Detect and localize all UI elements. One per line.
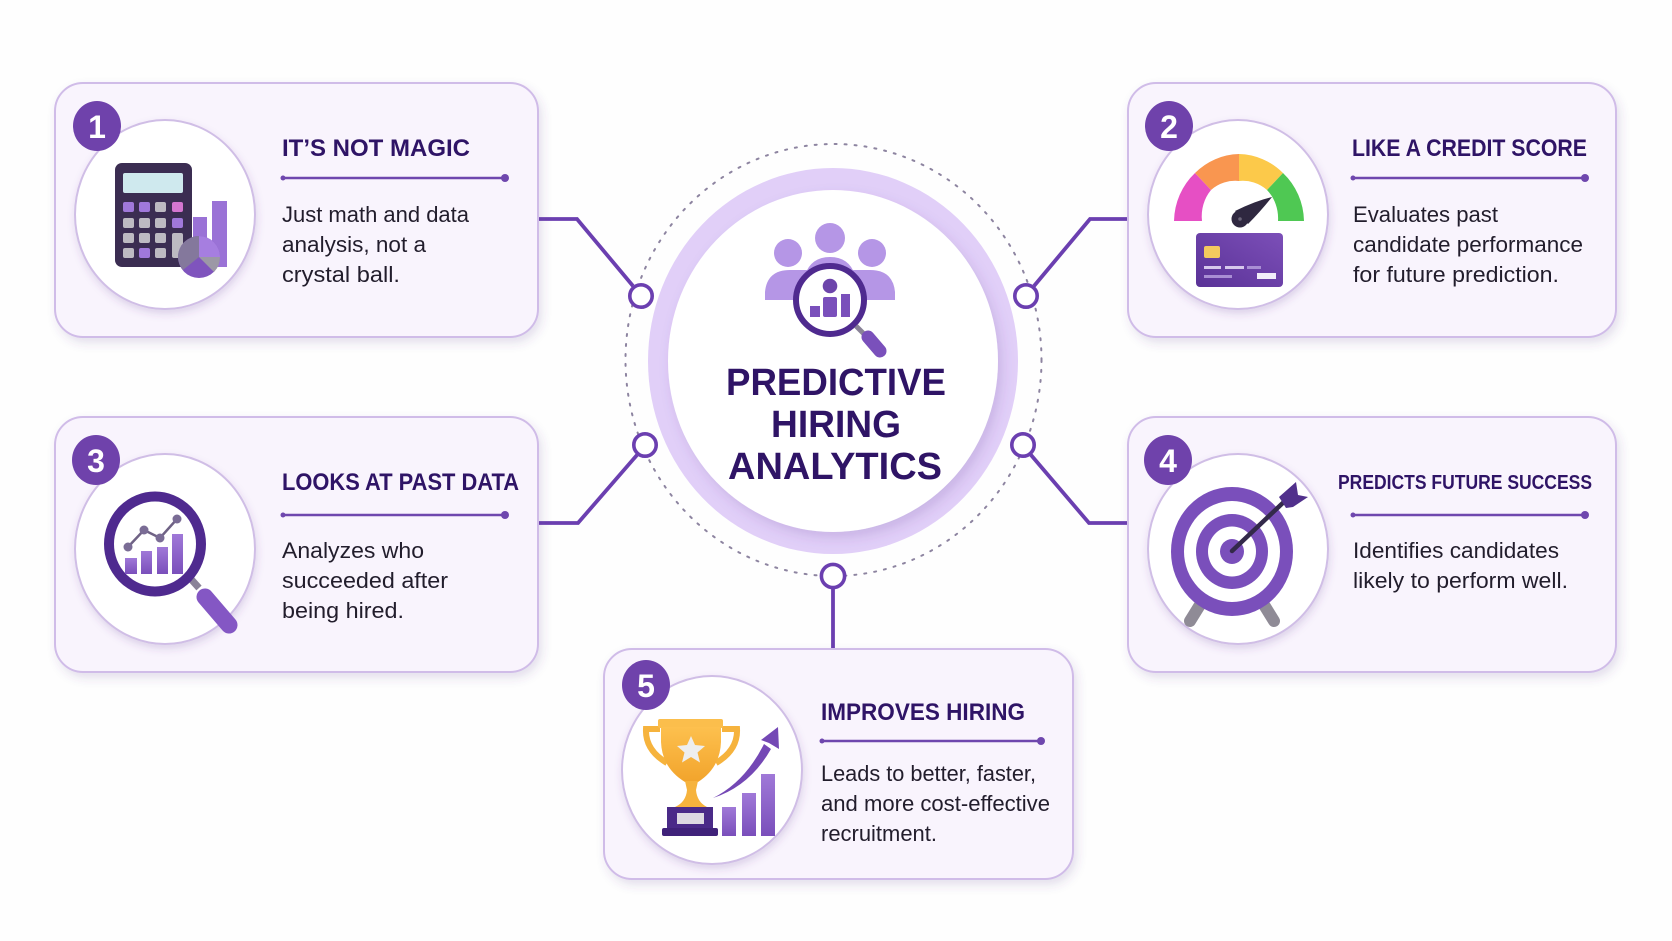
body text: Analyzes who xyxy=(282,538,424,563)
body text xyxy=(1353,202,1583,287)
title xyxy=(726,362,946,488)
title: PREDICTIVE xyxy=(726,362,946,404)
body text: Leads to better, faster, xyxy=(821,761,1036,786)
body text: analysis, not a xyxy=(282,232,427,257)
body text xyxy=(1353,538,1568,593)
badge 3 xyxy=(72,435,120,485)
panel: card 3 xyxy=(55,417,538,672)
body text: Evaluates past xyxy=(1353,202,1498,227)
connector: card 1 to center xyxy=(538,219,633,286)
body text: for future prediction. xyxy=(1353,262,1559,287)
divider xyxy=(1350,511,1589,519)
body text: being hired. xyxy=(282,598,404,623)
panel: card 1 xyxy=(55,83,538,337)
panel: card 4 xyxy=(1128,417,1616,672)
divider xyxy=(280,511,509,519)
divider xyxy=(1350,174,1589,182)
hub ring xyxy=(648,168,1018,554)
connector: card 5 to center xyxy=(831,588,835,649)
badge 2: 2 xyxy=(1160,109,1178,145)
badge 1: 1 xyxy=(88,109,106,145)
heading: LIKE A CREDIT SCORE xyxy=(1352,135,1587,162)
body text xyxy=(282,202,470,287)
divider xyxy=(820,737,1045,745)
heading: IT’S NOT MAGIC xyxy=(282,135,470,162)
title: HIRING xyxy=(771,404,901,446)
icon: gauge and credit card xyxy=(1174,154,1304,287)
body text: Just math and data xyxy=(282,202,470,227)
dotted orbit xyxy=(626,144,1042,576)
body text: candidate performance xyxy=(1353,232,1583,257)
divider xyxy=(280,174,509,182)
icon: trophy with growth bars xyxy=(646,719,779,836)
connector nodes xyxy=(630,285,1037,588)
badge 5 xyxy=(622,660,670,710)
icon: calculator with charts xyxy=(115,163,227,278)
body text: and more cost-effective xyxy=(821,791,1050,816)
connector: card 4 to center xyxy=(1031,455,1128,523)
badge 4: 4 xyxy=(1159,443,1177,479)
body text: Identifies candidates xyxy=(1353,538,1559,563)
body text xyxy=(821,761,1050,846)
heading: LOOKS AT PAST DATA xyxy=(282,469,519,496)
badge 5: 5 xyxy=(637,668,655,704)
connector: card 3 to center xyxy=(538,455,637,523)
body text: recruitment. xyxy=(821,821,937,846)
icon: magnifier with chart xyxy=(109,496,229,625)
badge 3: 3 xyxy=(87,443,105,479)
panel: card 5 xyxy=(604,649,1073,879)
badge 2 xyxy=(1145,101,1193,151)
badge 4 xyxy=(1144,435,1192,485)
center hub xyxy=(648,168,1018,554)
heading: PREDICTS FUTURE SUCCESS xyxy=(1338,472,1592,494)
badge 1 xyxy=(73,101,121,151)
body text xyxy=(282,538,448,623)
title: ANALYTICS xyxy=(728,446,942,488)
heading: IMPROVES HIRING xyxy=(821,699,1025,726)
icon: people under magnifier xyxy=(765,223,895,351)
panel: card 2 xyxy=(1128,83,1616,337)
body text: likely to perform well. xyxy=(1353,568,1568,593)
body text: succeeded after xyxy=(282,568,448,593)
body text: crystal ball. xyxy=(282,262,400,287)
connector: card 2 to center xyxy=(1034,219,1128,286)
icon: target with arrow xyxy=(1171,482,1308,621)
hub disc xyxy=(668,190,998,532)
